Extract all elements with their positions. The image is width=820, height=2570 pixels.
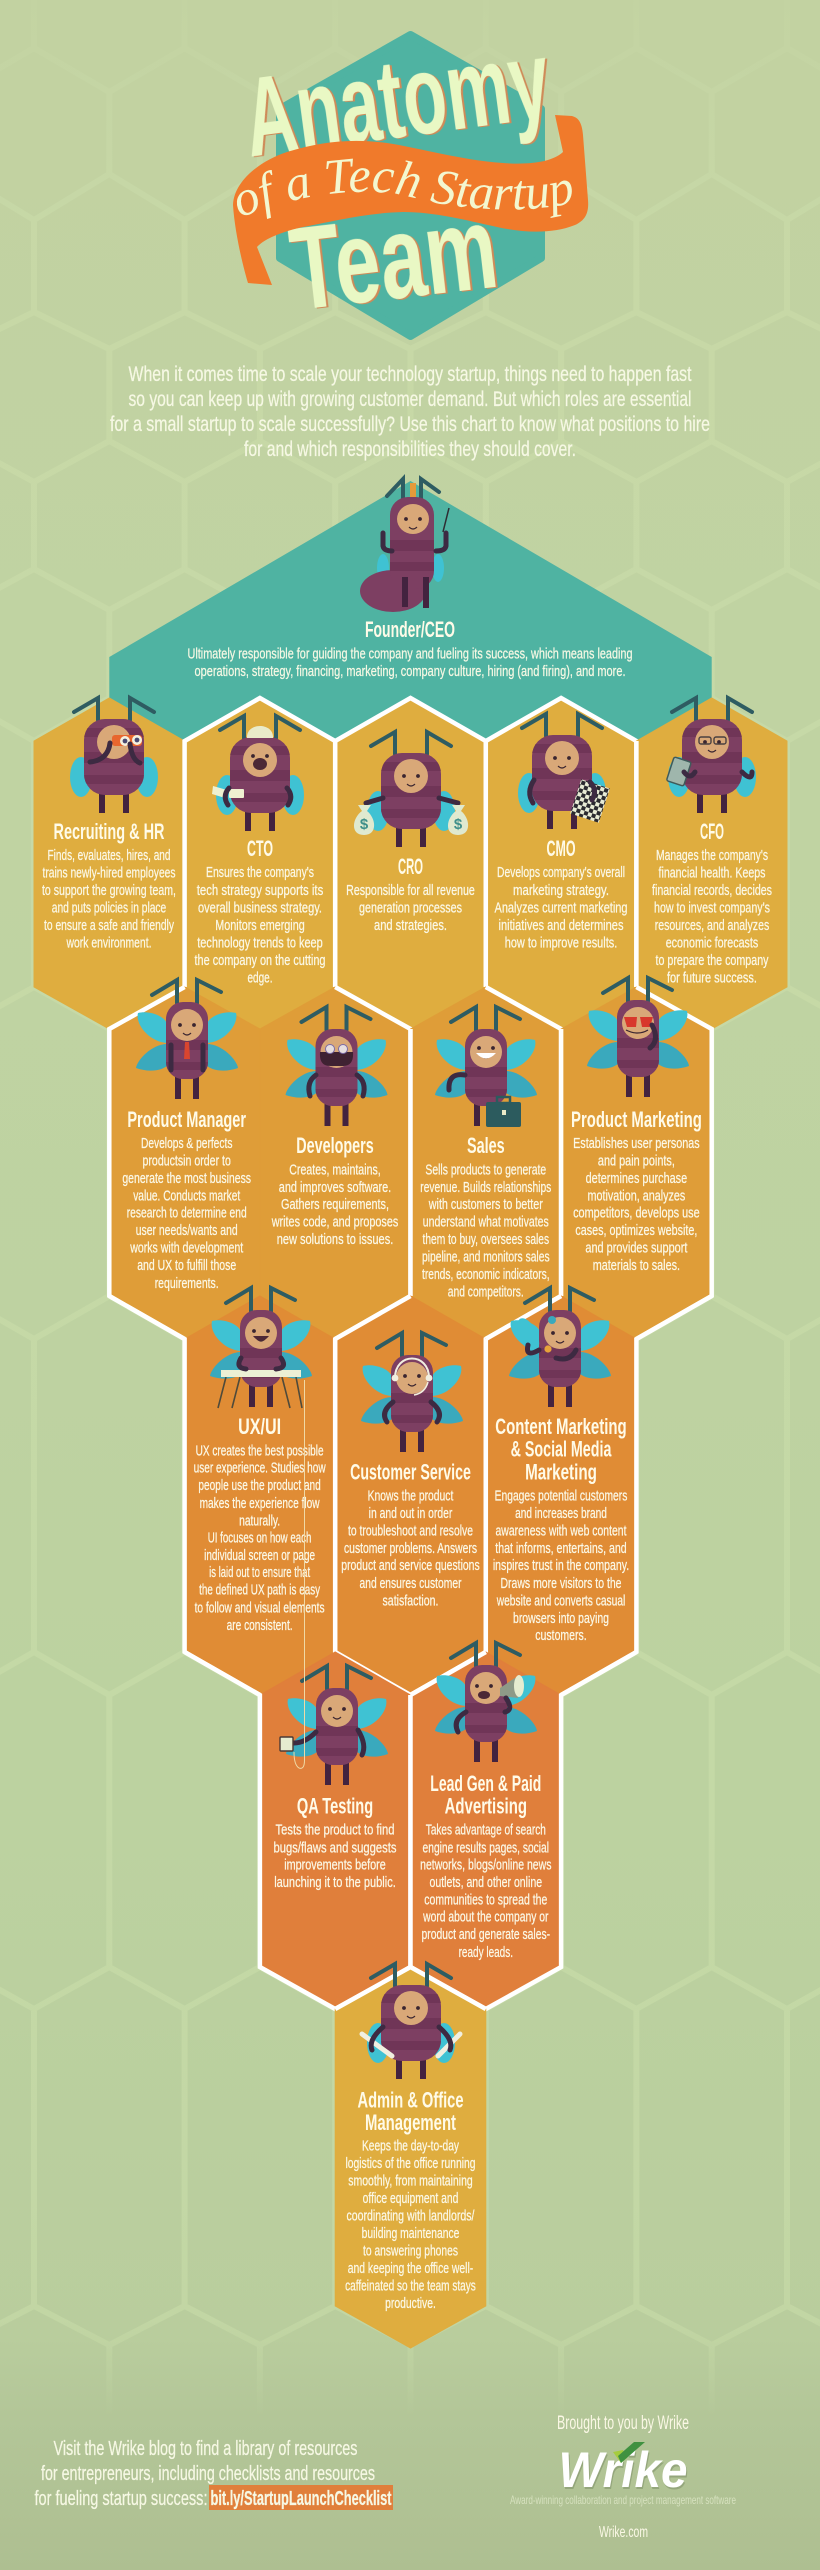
text block: revenue. Builds relationships bbox=[420, 1180, 551, 1196]
text block: are consistent. bbox=[227, 1618, 293, 1634]
text block: bugs/flaws and suggests bbox=[274, 1840, 396, 1856]
text block bbox=[493, 1488, 629, 1644]
text block: Ensures the company's bbox=[206, 865, 314, 881]
text block: engine results pages, social bbox=[423, 1840, 549, 1856]
text block: outlets, and other online bbox=[430, 1875, 542, 1891]
text block: and puts policies in place bbox=[52, 900, 166, 916]
text block bbox=[652, 848, 772, 986]
heading: CRO bbox=[398, 854, 423, 879]
text block: caffeinated so the team stays bbox=[345, 2278, 476, 2294]
heading: Customer Service bbox=[350, 1460, 471, 1484]
text block: and ensures customer bbox=[360, 1576, 462, 1592]
footer call to action: for entrepreneurs, including checklists and resources bbox=[41, 2463, 375, 2485]
panel: CRO bbox=[335, 698, 486, 1029]
text block: generation processes bbox=[359, 900, 462, 916]
text block bbox=[188, 646, 632, 680]
heading: CTO bbox=[247, 836, 273, 861]
intro text: for and which responsibilities they should cover. bbox=[244, 438, 576, 461]
panel: Product Marketing bbox=[561, 978, 712, 1339]
heading: Founder/CEO bbox=[365, 617, 455, 642]
text block: trends, economic indicators, bbox=[422, 1267, 550, 1283]
text block: Sells products to generate bbox=[425, 1162, 546, 1178]
text block: materials to sales. bbox=[593, 1258, 680, 1274]
text block: makes the experience flow bbox=[200, 1496, 320, 1512]
text block: writes code, and proposes bbox=[271, 1214, 398, 1230]
text block: smoothly, from maintaining bbox=[348, 2174, 473, 2190]
icon: CRO bee with money bags: $ bbox=[360, 816, 369, 833]
panel: UX/UI bbox=[109, 1288, 335, 1695]
link text: bit.ly/StartupLaunchChecklist bbox=[210, 2488, 392, 2510]
text block: Keeps the day-to-day bbox=[362, 2138, 460, 2154]
panel: Founder/CEO bbox=[109, 479, 712, 741]
title hexagon bbox=[280, 35, 541, 336]
text block: ready leads. bbox=[459, 1945, 513, 1961]
icon: CMO bee with chart board bbox=[518, 714, 610, 829]
footer credit: Brought to you by Wrike bbox=[557, 2413, 689, 2434]
heading: Advertising bbox=[445, 1794, 527, 1818]
footer call to action bbox=[34, 2438, 393, 2510]
heading: Marketing bbox=[525, 1460, 597, 1484]
ribbon bbox=[233, 115, 588, 285]
heading: Recruiting & HR bbox=[54, 819, 165, 844]
text block: browsers into paying bbox=[513, 1611, 609, 1627]
text block: to ensure a safe and friendly bbox=[44, 918, 175, 934]
icon: content marketing bee bbox=[509, 1288, 611, 1407]
text block: customer problems. Answers bbox=[344, 1541, 477, 1557]
text block: inspires trust in the company. bbox=[493, 1558, 629, 1574]
icon: recruiter bee with binoculars bbox=[70, 698, 158, 813]
text block: Engages potential customers bbox=[495, 1488, 627, 1504]
text block bbox=[274, 1823, 396, 1891]
text block: determines purchase bbox=[586, 1171, 687, 1187]
text block bbox=[573, 1136, 700, 1274]
text block: how to improve results. bbox=[505, 935, 617, 951]
text block: resources, and analyzes bbox=[655, 918, 769, 934]
text block: trains newly-hired employees bbox=[42, 866, 176, 882]
text block: Responsible for all revenue bbox=[346, 883, 475, 899]
icon: CRO bee with money bags: $ bbox=[454, 816, 463, 833]
text block bbox=[346, 883, 475, 934]
heading: Admin & Office bbox=[358, 2088, 464, 2112]
text block: motivation, analyzes bbox=[588, 1188, 685, 1204]
text block: Establishes user personas bbox=[573, 1136, 700, 1152]
text block: understand what motivates bbox=[423, 1214, 549, 1230]
panel: Admin & Office Management bbox=[335, 1964, 486, 2348]
text block: Gathers requirements, bbox=[281, 1197, 389, 1213]
text block: requirements. bbox=[155, 1276, 219, 1292]
text block: financial records, decides bbox=[652, 883, 772, 899]
text block: productive. bbox=[385, 2296, 436, 2312]
text block: logistics of the office running bbox=[346, 2156, 476, 2172]
heading: & Social Media bbox=[511, 1437, 612, 1462]
text block bbox=[341, 1488, 480, 1609]
panel: Product Manager bbox=[109, 980, 260, 1339]
heading: QA Testing bbox=[297, 1794, 373, 1818]
text block: to answering phones bbox=[363, 2244, 458, 2260]
text block: building maintenance bbox=[362, 2226, 459, 2242]
text block: to prepare the company bbox=[656, 953, 769, 969]
text block: networks, blogs/online news bbox=[420, 1858, 552, 1874]
text block bbox=[345, 2138, 476, 2312]
text block: and strategies. bbox=[374, 918, 447, 934]
heading: CFO bbox=[700, 819, 724, 844]
text block: tech strategy supports its bbox=[197, 883, 323, 899]
text block: initiatives and determines bbox=[498, 918, 624, 934]
text block: Develops company's overall bbox=[497, 865, 625, 881]
text block: awareness with web content bbox=[496, 1524, 626, 1540]
text block: naturally. bbox=[239, 1513, 280, 1529]
text block: individual screen or page bbox=[204, 1548, 315, 1564]
text block: value. Conducts market bbox=[133, 1188, 240, 1204]
icon: product manager bee with tie bbox=[136, 980, 238, 1099]
text block: financial health. Keeps bbox=[658, 866, 766, 882]
text block: in and out in order bbox=[369, 1506, 452, 1522]
heading: Product Manager bbox=[127, 1107, 246, 1132]
text block: product and generate sales- bbox=[422, 1927, 550, 1943]
text block: Creates, maintains, bbox=[289, 1162, 381, 1178]
heading bbox=[495, 1414, 627, 1484]
text block: to support the growing team, bbox=[42, 883, 176, 899]
text block: website and converts casual bbox=[496, 1593, 625, 1609]
text block: Monitors emerging bbox=[215, 918, 305, 934]
text block: productsin order to bbox=[142, 1153, 231, 1169]
text block bbox=[271, 1162, 398, 1248]
text block: overall business strategy. bbox=[198, 900, 322, 916]
text block: customers. bbox=[535, 1628, 587, 1644]
icon: sales bee with briefcase bbox=[435, 1007, 537, 1127]
text block: technology trends to keep bbox=[197, 935, 323, 951]
text block: people use the product and bbox=[198, 1478, 321, 1494]
icon: customer service bee with headset bbox=[361, 1333, 463, 1452]
panel: CMO bbox=[486, 698, 636, 1029]
icon: lead gen bee with megaphone bbox=[435, 1643, 537, 1762]
text block: coordinating with landlords/ bbox=[346, 2208, 475, 2224]
text block: new solutions to issues. bbox=[277, 1232, 393, 1248]
text block: improvements before bbox=[284, 1858, 386, 1874]
panel: Developers bbox=[260, 987, 410, 1339]
text block: and keeping the office well- bbox=[348, 2261, 473, 2277]
link highlight bbox=[209, 2485, 393, 2510]
text block: cases, optimizes website, bbox=[575, 1223, 697, 1239]
text block: and competitors. bbox=[448, 1284, 524, 1300]
text block: launching it to the public. bbox=[274, 1875, 396, 1891]
text block: Manages the company's bbox=[656, 848, 768, 864]
panel: CTO bbox=[185, 698, 335, 1029]
text block: user needs/wants and bbox=[136, 1223, 238, 1239]
text block: Tests the product to find bbox=[276, 1823, 394, 1839]
footer call to action: for fueling startup success: bbox=[34, 2488, 208, 2510]
text block: is laid out to ensure that bbox=[209, 1565, 310, 1581]
text block: generate the most business bbox=[122, 1171, 251, 1187]
text block: and pain points, bbox=[598, 1153, 675, 1169]
text block: to follow and visual elements bbox=[195, 1600, 325, 1616]
text block: Analyzes current marketing bbox=[494, 900, 628, 916]
text block: satisfaction. bbox=[382, 1593, 438, 1609]
text block bbox=[420, 1823, 552, 1961]
text block: work environment. bbox=[66, 935, 152, 951]
text block: for future success. bbox=[667, 970, 757, 986]
panel: Recruiting & HR bbox=[34, 698, 185, 1029]
text block bbox=[194, 1444, 326, 1634]
title word: Team: Team bbox=[284, 181, 504, 336]
footer credit: Wrike.com bbox=[599, 2524, 648, 2541]
text block: Develops & perfects bbox=[141, 1136, 232, 1152]
panel: QA Testing bbox=[185, 1380, 410, 2009]
heading: Developers bbox=[296, 1133, 374, 1158]
panel: Lead Gen & Paid Advertising bbox=[410, 1643, 636, 2009]
title bbox=[233, 16, 588, 340]
text block bbox=[42, 848, 176, 951]
text block: and UX to fulfill those bbox=[137, 1258, 236, 1274]
text block: word about the company or bbox=[422, 1910, 549, 1926]
text block: that informs, entertains, and bbox=[495, 1541, 627, 1557]
text block: competitors, develops use bbox=[573, 1206, 700, 1222]
footer call to action: Visit the Wrike blog to find a library of resources bbox=[54, 2438, 358, 2460]
icon: CRO bee with money bags bbox=[354, 732, 468, 847]
text block: edge. bbox=[248, 970, 272, 986]
heading: Management bbox=[365, 2110, 456, 2135]
heading: Sales bbox=[467, 1133, 505, 1158]
heading: UX/UI bbox=[238, 1414, 281, 1439]
text block bbox=[420, 1162, 551, 1300]
text block: UI focuses on how each bbox=[208, 1530, 311, 1546]
text block: communities to spread the bbox=[424, 1892, 547, 1908]
icon: admin bee with tools bbox=[362, 1964, 460, 2079]
heading bbox=[358, 2088, 464, 2135]
text block: operations, strategy, financing, marketing, company culture, hiring (and firing), and more. bbox=[194, 663, 626, 680]
text block: UX creates the best possible bbox=[196, 1444, 324, 1460]
icon: UX/UI bee at keyboard desk bbox=[210, 1288, 312, 1408]
text block: Takes advantage of search bbox=[426, 1823, 546, 1839]
heading: Lead Gen & Paid bbox=[430, 1771, 541, 1796]
text block: pipeline, and monitors sales bbox=[422, 1250, 550, 1266]
footer credit bbox=[510, 2413, 736, 2541]
heading: Content Marketing bbox=[495, 1414, 627, 1439]
text block: Knows the product bbox=[368, 1488, 453, 1504]
panel: Content Marketing & Social Media Marketing bbox=[410, 1288, 712, 1695]
text block: the defined UX path is easy bbox=[199, 1583, 321, 1599]
text block: and provides support bbox=[585, 1240, 687, 1256]
text block: and improves software. bbox=[279, 1180, 391, 1196]
text block bbox=[122, 1136, 251, 1292]
panel: Sales bbox=[410, 987, 561, 1339]
text block: product and service questions bbox=[341, 1558, 480, 1574]
text block: user experience. Studies how bbox=[194, 1461, 326, 1477]
icon: QA bee holding mouse bbox=[280, 1380, 388, 1785]
icon: CFO bee with calculator bbox=[666, 698, 756, 813]
text block: the company on the cutting bbox=[194, 953, 326, 969]
heading: Product Marketing bbox=[571, 1107, 702, 1132]
panel: Customer Service bbox=[335, 1296, 561, 1695]
text block: with customers to better bbox=[428, 1197, 543, 1213]
text block: works with development bbox=[129, 1240, 243, 1256]
text block bbox=[494, 865, 628, 951]
heading: CMO bbox=[546, 836, 576, 861]
heading bbox=[430, 1771, 541, 1818]
text block bbox=[194, 865, 326, 986]
Wrike logo: Wrike bbox=[558, 2442, 688, 2498]
text block: to troubleshoot and resolve bbox=[348, 1524, 473, 1540]
text block: Draws more visitors to the bbox=[500, 1576, 622, 1592]
text block: economic forecasts bbox=[666, 935, 758, 951]
text block: Finds, evaluates, hires, and bbox=[48, 848, 170, 864]
icon: founder bee bbox=[360, 479, 449, 612]
icon: product marketing bee with sunglasses bbox=[587, 978, 689, 1097]
icon: developer bee with beard bbox=[286, 1007, 388, 1126]
text block: how to invest company's bbox=[654, 900, 770, 916]
ribbon text: of a Tech Startup bbox=[236, 158, 572, 219]
text block: them to buy, oversees sales bbox=[422, 1232, 549, 1248]
text block: and increases brand bbox=[515, 1506, 607, 1522]
text block: research to determine end bbox=[127, 1206, 247, 1222]
text block: office equipment and bbox=[363, 2191, 458, 2207]
icon: CTO bee with hard hat bbox=[212, 716, 304, 831]
intro text bbox=[110, 363, 710, 461]
text block: marketing strategy. bbox=[513, 883, 609, 899]
text block: Ultimately responsible for guiding the company and fueling its success, which means leading bbox=[188, 646, 632, 662]
panel: CFO bbox=[636, 698, 787, 1029]
